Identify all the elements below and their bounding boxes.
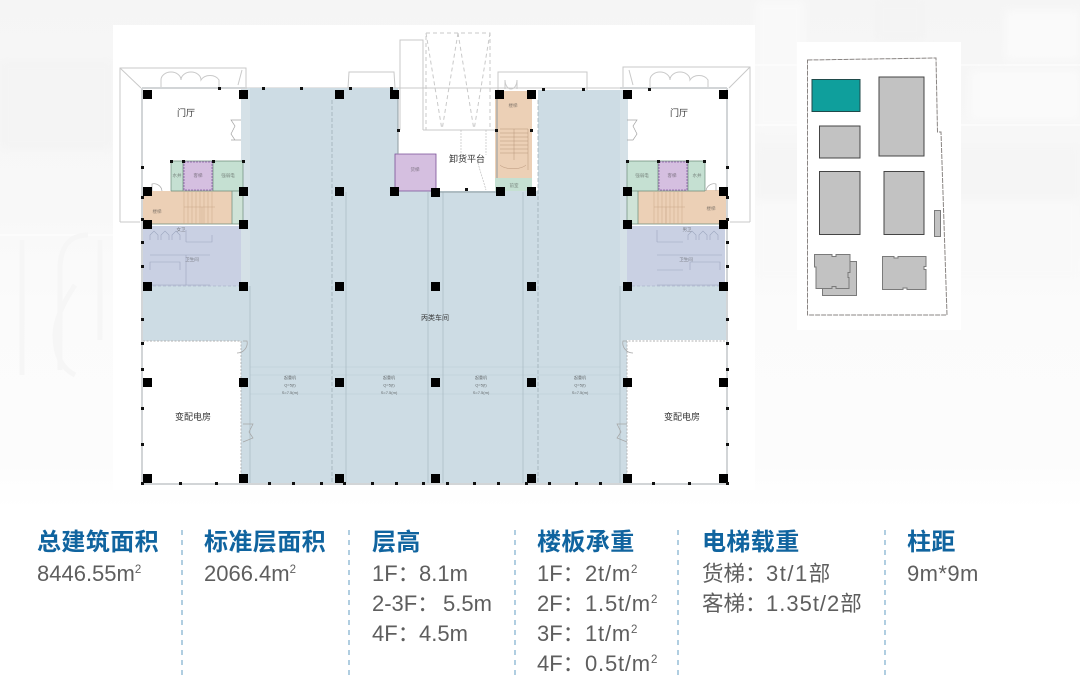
- room labels: 变配电房: [664, 411, 700, 422]
- spec: floor height: 4F：: [372, 621, 419, 646]
- highlighted building: [812, 80, 860, 112]
- spec: floor load: 4F：: [537, 651, 584, 676]
- small room labels: 客梯: [668, 172, 677, 179]
- small room labels: 楼梯: [706, 205, 716, 212]
- spec: total floor area: 2: [135, 564, 141, 576]
- spec: floor height: 1F：: [372, 561, 419, 586]
- small room labels: 卫生间: [679, 256, 693, 263]
- spec: total floor area: [37, 529, 159, 586]
- spec: column spacing: 9m*9m: [907, 561, 979, 586]
- spec: floor height: 8.1m: [419, 561, 468, 586]
- crane labels: 起重机: [284, 374, 296, 380]
- crane labels: S=7.5(m): [282, 390, 299, 395]
- bay lines: [250, 100, 620, 484]
- spec: standard floor area: 标准层面积: [204, 529, 326, 556]
- crane labels: S=7.5(m): [381, 390, 398, 395]
- crane labels: [282, 374, 589, 395]
- exterior outlines and entrance canopies: [120, 33, 750, 222]
- small room labels: 楼梯: [152, 208, 162, 215]
- small room labels: 强弱电: [635, 172, 649, 179]
- spec: elevator capacity: 客梯：: [702, 592, 767, 616]
- spec: floor height: 2-3F：: [372, 591, 439, 616]
- background: faded building photo: [0, 0, 1080, 510]
- spec: floor load: 1t/m: [585, 621, 631, 646]
- right service core: [627, 161, 727, 286]
- other buildings: [820, 77, 924, 234]
- small room labels: 水井: [172, 172, 182, 179]
- spec: floor load: 1F：: [537, 561, 584, 586]
- crane labels: 起重机: [383, 374, 395, 380]
- spec: elevator capacity: 电梯载重: [702, 529, 800, 556]
- spec: floor load: 2: [651, 594, 657, 606]
- small room labels: 楼梯: [508, 102, 518, 109]
- spec: total floor area: 总建筑面积: [37, 529, 159, 556]
- panel: floor plan: [113, 25, 755, 490]
- room labels: 变配电房: [175, 411, 211, 422]
- panel: site plan: [797, 42, 961, 330]
- spec: elevator capacity: 部: [809, 562, 830, 586]
- crane labels: Q=5(t): [574, 382, 586, 388]
- spec: elevator capacity: 3t/1: [766, 561, 809, 586]
- spec: floor load: 楼板承重: [537, 529, 635, 556]
- small room labels: 水井: [692, 172, 702, 179]
- spec: elevator capacity: 1.35t/2: [766, 591, 840, 616]
- spec: floor height: 层高: [372, 529, 421, 556]
- spec: floor load: 1.5t/m: [585, 591, 651, 616]
- crane labels: Q=5(t): [475, 382, 487, 388]
- small room labels: 前室: [510, 182, 519, 189]
- central stair and lift: [395, 90, 532, 192]
- spec: floor load: 2F：: [537, 591, 584, 616]
- structural columns: [143, 90, 728, 483]
- small room labels: 女卫: [176, 226, 186, 233]
- spec: total floor area: 8446.55m: [37, 561, 135, 586]
- spec: elevator capacity: 部: [840, 592, 862, 616]
- spec: standard floor area: 2: [290, 564, 296, 576]
- dividers: [182, 530, 885, 678]
- left service core: [143, 161, 243, 286]
- small room labels: 卫生间: [185, 256, 199, 263]
- spec: column spacing: [907, 529, 979, 586]
- spec: elevator capacity: 货梯：: [702, 562, 767, 586]
- room labels: 门厅: [670, 107, 688, 118]
- spec: floor load: [537, 529, 657, 676]
- small room labels: [152, 102, 716, 263]
- crane labels: 起重机: [574, 374, 586, 380]
- room labels: 丙类车间: [421, 313, 449, 322]
- room labels: 门厅: [177, 107, 195, 118]
- small room labels: 男卫: [682, 227, 692, 233]
- crane labels: S=7.5(m): [572, 390, 589, 395]
- small room labels: 强弱电: [221, 172, 235, 179]
- crane labels: S=7.5(m): [473, 390, 490, 395]
- spec: floor height: 5.5m: [443, 591, 492, 616]
- spec: floor load: 2: [631, 564, 637, 576]
- spec: column spacing: 柱距: [907, 529, 956, 556]
- outer walls: [142, 88, 727, 484]
- spec: elevator capacity: [702, 529, 862, 616]
- spec: floor load: 2: [631, 624, 637, 636]
- spec: floor load: 0.5t/m: [585, 651, 651, 676]
- corridor shade: [241, 88, 628, 286]
- room labels: 卸货平台: [449, 153, 485, 164]
- crane labels: Q=5(t): [284, 382, 296, 388]
- spec: floor load: 2: [651, 654, 657, 666]
- spec: standard floor area: [204, 529, 326, 586]
- spec: floor height: [372, 529, 492, 646]
- small room labels: 货梯: [410, 166, 420, 173]
- site boundary: [808, 58, 947, 315]
- small room labels: 客梯: [194, 172, 203, 179]
- workshop area: [143, 88, 727, 484]
- crane labels: 起重机: [475, 374, 487, 380]
- crane labels: Q=5(t): [383, 382, 395, 388]
- spec: floor load: 3F：: [537, 621, 584, 646]
- spec: standard floor area: 2066.4m: [204, 561, 290, 586]
- spec: floor height: 4.5m: [419, 621, 468, 646]
- spec: floor load: 2t/m: [585, 561, 631, 586]
- room labels: [175, 107, 700, 422]
